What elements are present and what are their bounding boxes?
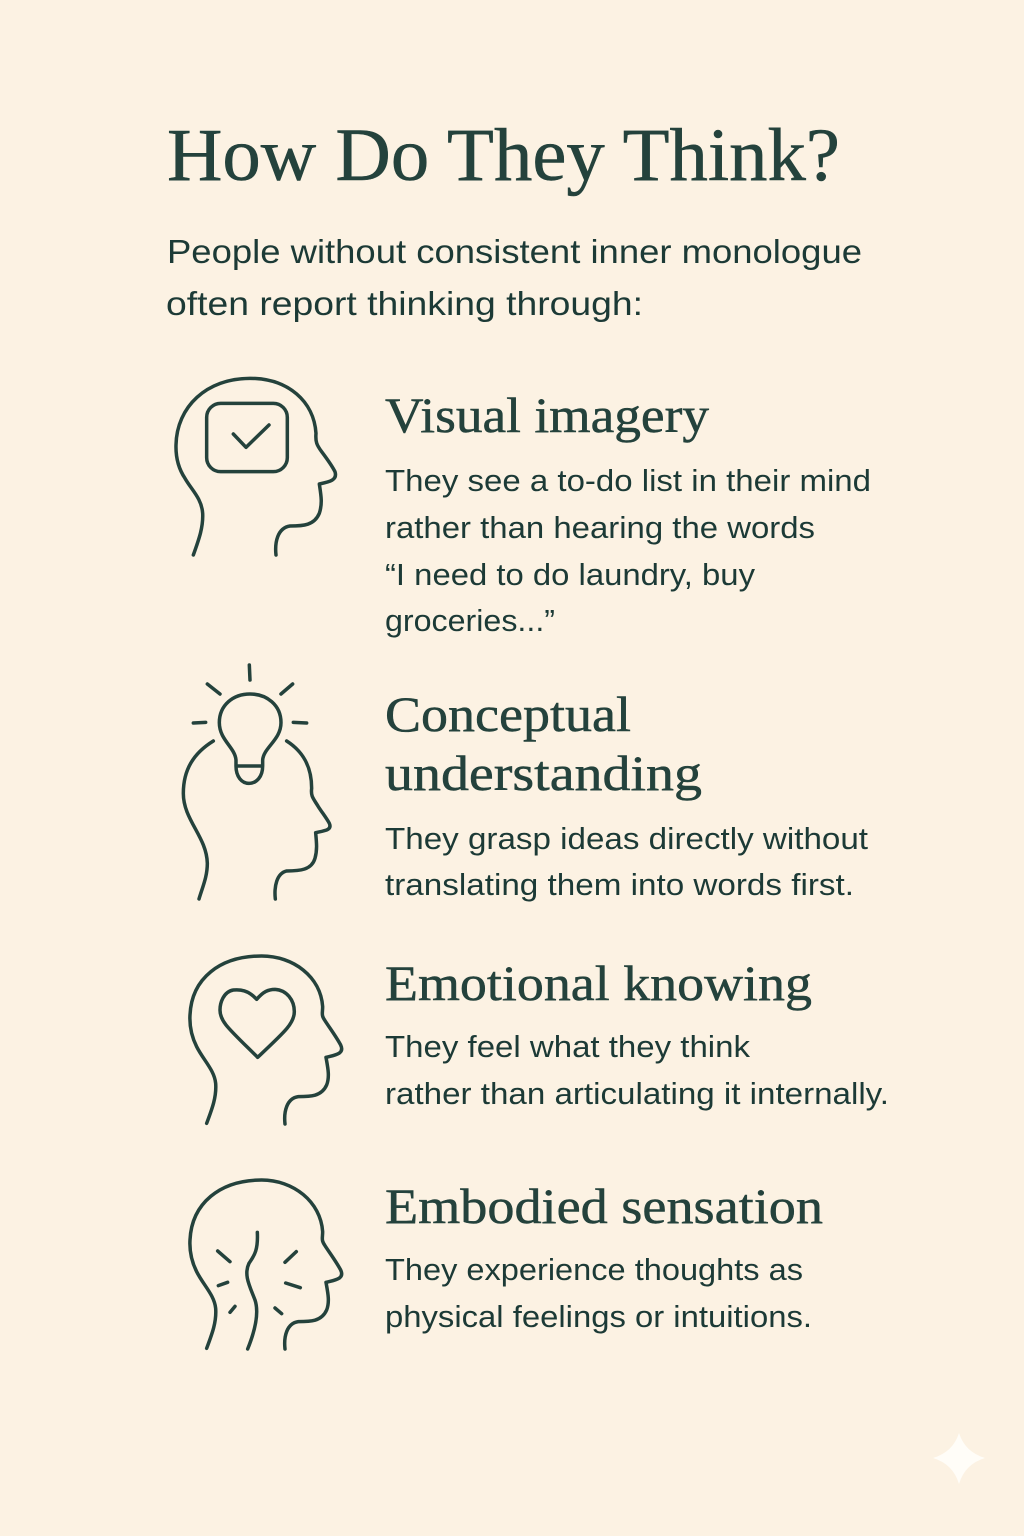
description: rather than articulating it internally. <box>385 1077 889 1111</box>
description <box>385 464 871 638</box>
icon: sparkle <box>933 1433 985 1484</box>
description: “I need to do laundry, buy <box>385 558 756 592</box>
heading: Emotional knowing <box>385 955 812 1011</box>
intro text: often report thinking through: <box>166 285 643 322</box>
panel: emotional knowing <box>190 955 889 1124</box>
description <box>385 1253 812 1334</box>
description: They experience thoughts as <box>385 1253 803 1287</box>
heading: Conceptual <box>385 686 631 742</box>
description: They see a to-do list in their mind <box>385 464 871 498</box>
heading: Visual imagery <box>385 387 709 443</box>
icon: head with heart <box>190 956 342 1124</box>
icon: head with body sensations <box>190 1180 342 1349</box>
intro text <box>166 233 862 322</box>
description: They grasp ideas directly without <box>385 822 869 856</box>
description: They feel what they think <box>385 1030 751 1064</box>
description <box>385 1030 889 1111</box>
intro text: People without consistent inner monologue <box>167 233 862 270</box>
panel: embodied sensation <box>190 1178 823 1349</box>
heading: understanding <box>385 745 702 801</box>
heading: Embodied sensation <box>385 1178 823 1234</box>
title: How Do They Think? <box>167 114 840 197</box>
panel: conceptual understanding <box>183 665 869 902</box>
panel: visual imagery <box>176 378 871 638</box>
description: physical feelings or intuitions. <box>385 1300 812 1334</box>
description <box>385 822 869 902</box>
description: groceries...” <box>385 604 555 638</box>
icon: head with light bulb <box>183 665 330 899</box>
icon: head with checkbox <box>176 378 336 555</box>
description: rather than hearing the words <box>385 511 815 545</box>
description: translating them into words first. <box>385 868 854 902</box>
heading <box>385 686 702 801</box>
